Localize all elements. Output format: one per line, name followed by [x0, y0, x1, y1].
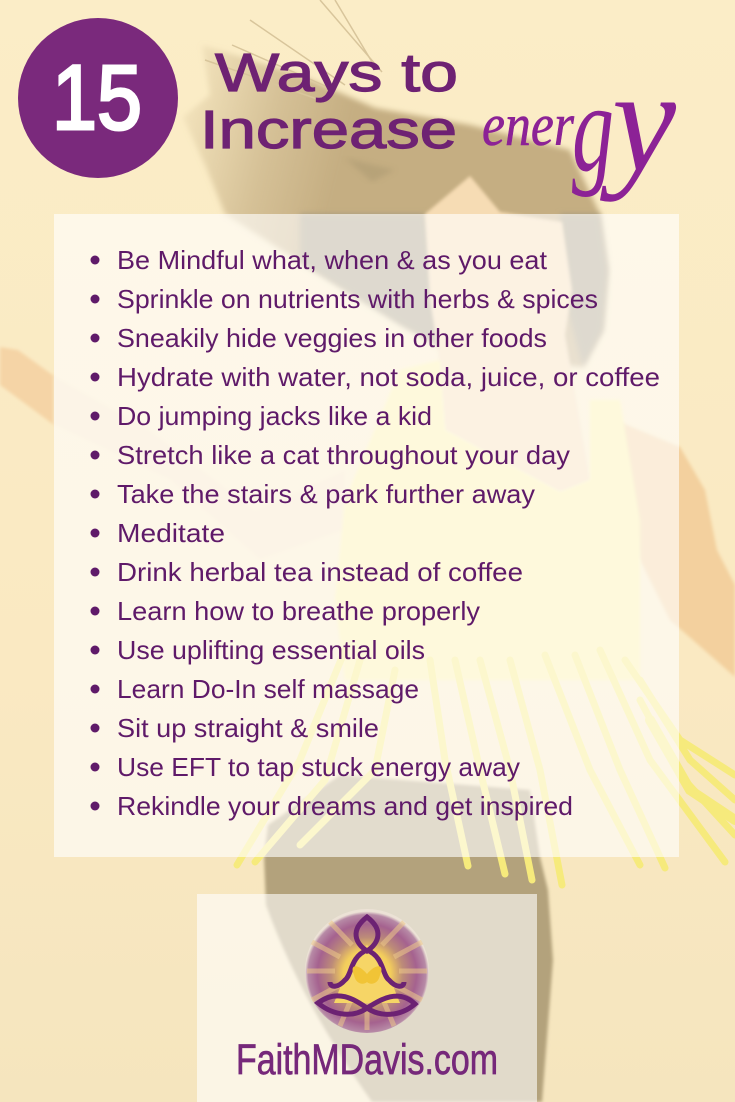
hair	[183, 0, 608, 367]
face and neck	[425, 176, 590, 492]
right arm	[615, 420, 735, 677]
icon: meditating figure logo	[305, 909, 429, 1033]
list text: Be Mindful what, when & as you eat	[117, 245, 548, 275]
script word: g	[572, 59, 614, 198]
list text: Use EFT to tap stuck energy away	[117, 752, 520, 782]
list text: Learn how to breathe properly	[117, 596, 480, 626]
bullets	[90, 256, 100, 810]
list text: Learn Do-In self massage	[117, 674, 419, 704]
number badge: 15	[52, 47, 142, 149]
list text: Sit up straight & smile	[117, 713, 379, 743]
list text: Do jumping jacks like a kid	[117, 401, 432, 431]
script word: ener	[482, 92, 575, 158]
title line 2: Increase	[200, 100, 457, 160]
leggings	[264, 775, 553, 1102]
fringe	[237, 650, 735, 885]
tank top	[335, 360, 640, 680]
list text	[117, 245, 660, 821]
number badge	[18, 18, 178, 178]
list text: Sprinkle on nutrients with herbs & spices	[117, 284, 598, 314]
list text: Stretch like a cat throughout your day	[117, 440, 570, 470]
list text: Drink herbal tea instead of coffee	[117, 557, 523, 587]
list text: Sneakily hide veggies in other foods	[117, 323, 547, 353]
list text: Hydrate with water, not soda, juice, or coffee	[117, 362, 660, 392]
website name: FaithMDavis.com	[236, 1036, 498, 1084]
list text: Rekindle your dreams and get inspired	[117, 791, 573, 821]
script word: y	[599, 39, 677, 202]
panel: list of 15 ways	[54, 214, 679, 857]
list text: Take the stairs & park further away	[117, 479, 535, 509]
script word	[482, 39, 677, 202]
heading: 15 Ways to Increase energy	[18, 18, 677, 202]
list text: Meditate	[117, 518, 225, 548]
title line 1: Ways to	[215, 43, 458, 103]
panel: logo and website	[197, 894, 537, 1102]
list text: Use uplifting essential oils	[117, 635, 425, 665]
left arm	[0, 347, 345, 560]
